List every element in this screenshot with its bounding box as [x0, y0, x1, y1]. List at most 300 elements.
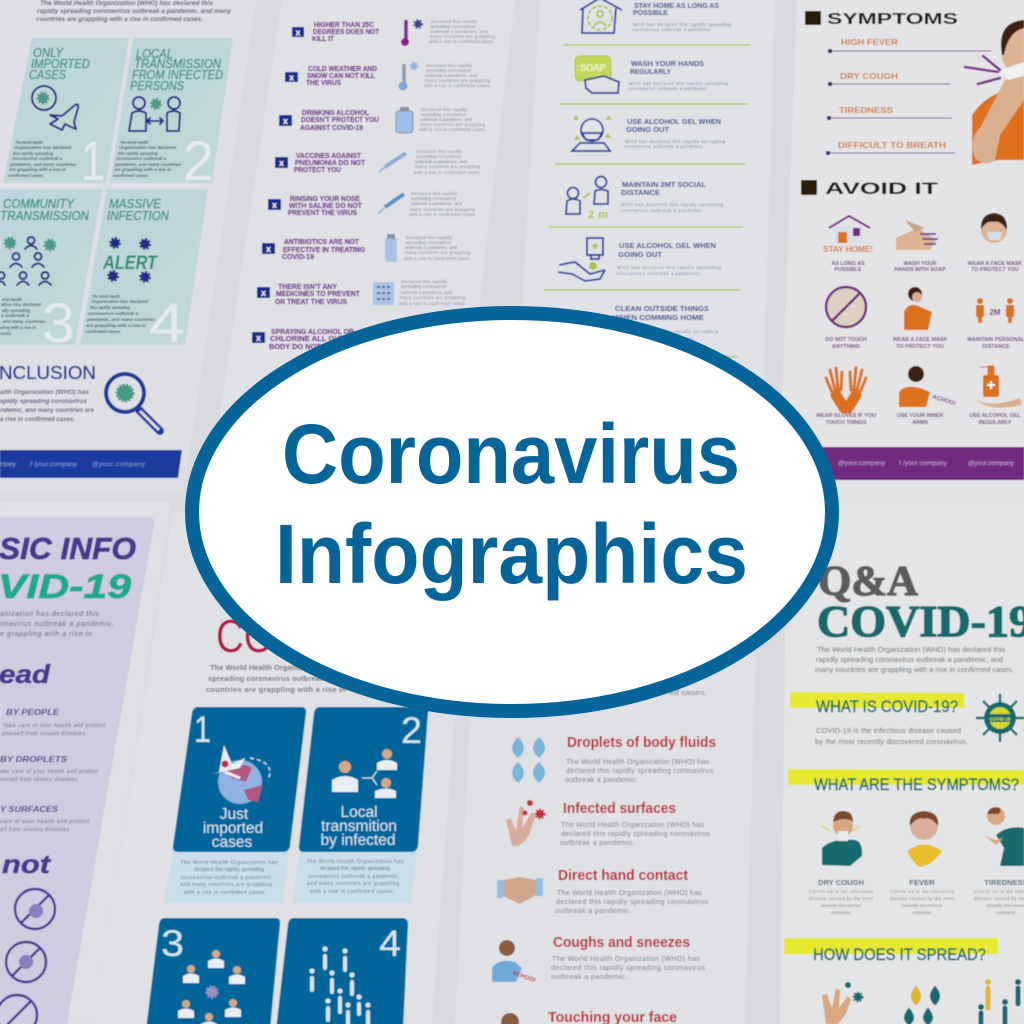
- title text: Coronavirus: [282, 407, 740, 501]
- myth descriptions: Declared this rapidly: [421, 107, 468, 112]
- card 4: 4: [379, 923, 401, 964]
- card 4: massive infection alert: 4: [149, 291, 185, 354]
- myth descriptions: Declared this rapidly: [411, 191, 458, 196]
- myth box marks: x: [256, 333, 261, 343]
- avoid it grid labels: USE YOUR INNER: [897, 413, 943, 419]
- spread section: yourself from viruses diseases.: [1, 731, 87, 737]
- card 4: massive infection alert: ALERT: [102, 253, 158, 274]
- row: coughs and sneezes: [492, 935, 705, 984]
- card 1: only imported cases: The World Health: [15, 140, 43, 145]
- icon: gloves: [826, 368, 866, 408]
- panel: myths list sheet: [205, 0, 515, 512]
- heading: Q&A: [818, 559, 919, 605]
- icon: hand with viruses: [822, 982, 862, 1024]
- prevention row text: GOING OUT: [618, 250, 662, 259]
- avoid it grid labels: AS LONG AS: [831, 261, 865, 267]
- intro text: e grappling with a rise in: [0, 631, 92, 638]
- footer bar: f /your.company: [899, 460, 948, 467]
- myth descriptions: spreading coronavirus: [421, 112, 467, 117]
- section: what is covid-19: by the most recently discovered coronavirus.: [815, 737, 968, 746]
- icon: masked person: [572, 117, 611, 151]
- intro text: [36, 0, 232, 23]
- card 4: massive infection alert: pandemic, and many countries: [86, 317, 155, 322]
- icon: fever person: [907, 811, 942, 867]
- symptom labels and captions: COVID-19 is the infectious: [809, 889, 874, 894]
- myth headings: PREVENT THE VIRUS: [288, 208, 357, 217]
- myth descriptions: Declared this rapidly: [401, 279, 448, 284]
- avoid it grid labels: DISTANCE: [982, 344, 1010, 350]
- card 2: local transmission: this rapidly spreading: [118, 151, 158, 156]
- icon: covid-19 virus badge: [976, 694, 1024, 742]
- symptom list: [826, 37, 991, 155]
- myth headings: AGAINST COVID-19: [300, 123, 363, 132]
- card 3: community transmission: [0, 189, 102, 354]
- myth headings: DRINKING ALCOHOL: [302, 108, 369, 117]
- card 1: and many countries are grappling: [180, 882, 272, 888]
- prevention row text: WHO has declared this rapidly spreading: [621, 202, 724, 207]
- card 4: massive infection alert: MASSIVE: [109, 196, 161, 211]
- symptom labels and captions: coronavirus.: [831, 910, 851, 915]
- card 4: massive infection alert: The World Health: [92, 294, 120, 299]
- card 1: 1: [194, 709, 211, 750]
- myth descriptions: spreading coronavirus: [411, 196, 457, 201]
- avoid it grid labels: POSSIBLE: [834, 267, 862, 273]
- myth descriptions: spreading coronavirus: [416, 154, 462, 159]
- spread section: BY DROPLETS: [0, 754, 67, 764]
- prevention row text: WHEN COMMING HOME: [613, 313, 704, 322]
- myth descriptions: many countries are grappling: [420, 122, 485, 127]
- footer bar: [0, 450, 182, 478]
- do not heading: not: [2, 849, 52, 879]
- card 2: local transmission: 2: [183, 129, 214, 192]
- avoid it grid labels: TO PROTECT YOU: [896, 344, 944, 350]
- symptom list: TIREDNESS: [839, 105, 893, 115]
- prevention row text: DISTANCE: [621, 188, 660, 197]
- avoid it grid labels: REGULARLY: [978, 420, 1012, 426]
- symptom list: DIFFICULT TO BREATH: [838, 140, 946, 150]
- panel: transmission stages sheet: [0, 0, 256, 490]
- myth descriptions: outbreak a pandemic, and: [420, 117, 472, 122]
- icon: social distance: [566, 176, 608, 221]
- intro text: countries are grappling with a rise in: [206, 685, 346, 694]
- avoid it grid labels: WEAR A FACE MASK: [968, 261, 1022, 267]
- card 1: only imported cases: coronavirus outbreak a: [12, 156, 62, 161]
- prevention row text: WHO has declared this rapidly spreading: [617, 265, 722, 270]
- title text: [275, 407, 748, 601]
- myth descriptions: many countries are grappling: [430, 34, 495, 39]
- myth headings: VACCINES AGAINST: [296, 151, 361, 160]
- title text: Infographics: [275, 507, 748, 601]
- myth descriptions: outbreak a pandemic, and: [430, 29, 488, 34]
- myth descriptions: outbreak a pandemic, and: [405, 245, 457, 250]
- avoid it heading: AVOID IT: [825, 180, 938, 198]
- card 4: [276, 918, 408, 1024]
- card 1: with a rise in confirmed cases.: [184, 890, 266, 896]
- card 1: only imported cases: this rapidly spreading: [13, 151, 53, 156]
- card 3: community transmission: pling with a rise in: [0, 325, 36, 330]
- heading: [0, 531, 136, 606]
- myth descriptions: many countries are grappling: [425, 78, 490, 83]
- avoid it grid labels: ANYTHING: [832, 344, 860, 350]
- card 2: and many countries are grappling: [307, 881, 399, 887]
- card 4: massive infection alert: confirmed cases.: [85, 329, 121, 334]
- intro text: [815, 645, 1014, 674]
- myth headings: EFFECTIVE IN TREATING: [283, 245, 365, 254]
- icon: 2m distance: [976, 298, 1014, 323]
- intro text: onavirus outbreak a pandemic,: [0, 621, 114, 628]
- card 1: only imported cases: are grappling with a rise in: [9, 167, 66, 172]
- myth descriptions: with a rise in confirmed cases.: [404, 256, 471, 261]
- prevention row text: coronavirus outbreak a pandemic.: [632, 27, 712, 32]
- row: droplets of body fluids: [514, 735, 716, 784]
- myth headings: SPRAYING ALCOHOL OR: [271, 327, 355, 336]
- myth descriptions: outbreak a pandemic, and: [410, 201, 462, 206]
- prevention row text: coronavirus outbreak a pandemic.: [624, 144, 704, 149]
- myth headings: COLD WEATHER AND: [308, 64, 377, 73]
- card 2: local transmission: are grappling with a rise in: [114, 167, 171, 172]
- symptom list: HIGH FEVER: [841, 37, 898, 47]
- card 3: community transmission: s outbreak a: [1, 313, 29, 318]
- symptom labels and captions: FEVER: [909, 878, 935, 887]
- card 2: with a rise in confirmed cases.: [310, 889, 394, 895]
- panel: basic info sheet: [0, 502, 172, 1024]
- avoid it grid labels: WEAR GLOVES IF YOU: [816, 413, 876, 419]
- avoid it grid labels: ARMS: [912, 420, 928, 426]
- symptoms heading: SYMPTOMS: [827, 11, 958, 28]
- icon: soap and hand: SOAP: [580, 63, 606, 74]
- footer bar: mpany: [0, 461, 17, 468]
- card 2: local transmission: coronavirus outbreak a: [116, 156, 166, 161]
- row: coughs and sneezes: declared this rapidly spreading coronavirus: [551, 963, 705, 972]
- card 2: local transmission: TRANSMISSION: [134, 56, 222, 71]
- myth descriptions: Declared this rapidly: [426, 63, 473, 68]
- footer bar: @your.company: [92, 461, 146, 468]
- card 1: declared this rapidly spreading: [194, 867, 264, 873]
- symptom labels and captions: coronavirus.: [996, 910, 1016, 915]
- row: droplets of body fluids: The World Health Organization (WHO) has: [566, 757, 709, 766]
- myth headings: RINSING YOUR NOSE: [290, 194, 360, 203]
- myth descriptions: many countries are grappling: [410, 207, 475, 212]
- row: droplets of body fluids: outbreak a pandemic.: [565, 775, 638, 784]
- row: infected surfaces: The World Health Organization (WHO) has: [561, 820, 704, 829]
- myth headings: BODY DO NOT KILL: [269, 342, 340, 351]
- row: infected surfaces: outbreak a pandemic.: [560, 838, 635, 847]
- prevention row text: [611, 1, 732, 341]
- row: direct hand contact: declared this rapidly spreading coronavirus: [556, 897, 708, 906]
- spread section: care of your health and protect: [0, 819, 90, 825]
- myth descriptions: spreading coronavirus: [430, 24, 476, 29]
- prevention row text: coronavirus outbreak a pandemic.: [611, 336, 696, 341]
- symptom list: DRY COUGH: [840, 71, 898, 81]
- card 2: local transmission: LOCAL: [136, 46, 173, 61]
- myth descriptions: spreading coronavirus: [401, 284, 447, 289]
- section: what is covid-19: WHAT IS COVID-19?: [816, 698, 958, 716]
- card 1: only imported cases: IMPORTED: [31, 56, 90, 71]
- heading: [817, 559, 1024, 646]
- avoid it grid labels: USE ALCOHOL GEL: [969, 413, 1021, 419]
- card 3: community transmission: idly spreading: [2, 308, 30, 313]
- myth descriptions: with a rise in confirmed cases.: [424, 83, 491, 88]
- myth headings: DEGREES DOES NOT: [313, 27, 379, 36]
- row: coughs and sneezes: The World Health Organization (WHO) has: [552, 954, 700, 963]
- row: infected surfaces: [506, 800, 710, 847]
- row: direct hand contact: Direct hand contact: [558, 868, 688, 884]
- symptom labels and captions: [809, 878, 1024, 915]
- card 2: transmition: [321, 818, 397, 835]
- card 2: [293, 707, 428, 903]
- card 2: local transmission: [110, 38, 233, 192]
- icon: sneezing child: [899, 366, 956, 407]
- icon: tired person: [985, 807, 1024, 866]
- myth box marks: x: [283, 116, 288, 126]
- prevention row text: USE ALCOHOL GEL WHEN: [627, 117, 721, 126]
- card 4: massive infection alert: [80, 189, 208, 354]
- card 2: 2: [401, 710, 422, 751]
- heading: VID-19: [0, 568, 131, 606]
- conclusion heading and text: apidly spreading coronavirus: [0, 398, 87, 405]
- row: droplets of body fluids: declared this rapidly spreading coronavirus: [566, 766, 713, 775]
- icon: soap and hand: [575, 56, 619, 93]
- intro text: spreading coronavirus outbreak: [208, 674, 325, 683]
- myth headings: HIGHER THAN 25C: [314, 20, 375, 29]
- prevention row text: coronavirus outbreak a pandemic.: [628, 86, 708, 91]
- card 1: Just: [220, 806, 249, 823]
- prevention row text: WHO has declared this rapidly spreading: [625, 139, 726, 144]
- card 2: local transmission: Organization has declared: [119, 145, 176, 150]
- avoid it heading: [801, 180, 938, 198]
- icon: covid-19 virus badge: COVID-19: [990, 716, 1011, 722]
- section: how does it spread: HOW DOES IT SPREAD?: [813, 946, 986, 964]
- myth descriptions: with a rise in confirmed cases.: [409, 212, 476, 217]
- icons: prohibited actions: [0, 889, 55, 1024]
- myth headings: DOESN'T PROTECT YOU: [301, 115, 379, 124]
- card 3: 3: [161, 923, 184, 964]
- card 2: local transmission: confirmed cases.: [113, 173, 149, 178]
- row: infected surfaces: Infected surfaces: [563, 801, 676, 817]
- prevention row text: coronavirus outbreak a pandemic.: [620, 208, 703, 213]
- conclusion heading and text: NCLUSION: [0, 362, 96, 383]
- symptom labels and captions: recently discovered: [821, 903, 862, 908]
- spread section: ourself from viruses diseases.: [0, 777, 79, 783]
- card 3: community transmission: , and many countries: [0, 319, 45, 324]
- prevention row text: CLEAN OUTSIDE THINGS: [615, 304, 709, 313]
- myth descriptions: Declared this rapidly: [406, 235, 453, 240]
- prevention row text: POSSIBLE: [633, 8, 668, 17]
- card 4: massive infection alert: Organization has declared: [91, 299, 148, 304]
- card 4: massive infection alert: this rapidly spreading: [90, 305, 130, 310]
- myth headings: WITH SALINE DO NOT: [289, 201, 362, 210]
- myth box marks: x: [289, 72, 294, 82]
- prevention row text: GOING OUT: [626, 125, 669, 134]
- avoid it grid labels: TO PROTECT YOU: [971, 267, 1019, 273]
- row: coughs and sneezes: ACHOO!: [511, 970, 536, 984]
- row: infected surfaces: declared this rapidly spreading coronavirus: [561, 829, 710, 838]
- section: what is covid-19: COVID-19 is the infectious disease caused: [816, 726, 961, 735]
- icon: dry cough person: [822, 811, 862, 866]
- icon: social distance: 2m: [588, 209, 608, 221]
- intro text: many countries are grappling with a rise in confirmed cases.: [815, 665, 1014, 674]
- prevention row text: USE ALCOHOL GEL WHEN: [619, 241, 716, 250]
- prevention row text: STAY HOME AS LONG AS: [634, 1, 719, 10]
- myth box marks: x: [261, 288, 266, 298]
- conclusion heading and text: [0, 362, 96, 423]
- myth headings: COVID-19: [282, 252, 314, 261]
- myth descriptions: many countries are grappling: [400, 295, 465, 300]
- myth descriptions: outbreak a pandemic, and: [400, 290, 452, 295]
- spread section: ake care of your health and protect: [0, 769, 99, 775]
- title ellipse badge: [192, 313, 832, 711]
- avoid it grid labels: [816, 261, 1024, 426]
- intro text: anization has declared this: [0, 611, 100, 618]
- footer bar: @your.company: [968, 460, 1015, 467]
- card 3: community transmission: ation has declared: [1, 302, 41, 307]
- icon: stay home: STAY HOME!: [823, 244, 873, 254]
- card 2: local transmission: FROM INFECTED: [132, 67, 223, 82]
- intro text: [206, 663, 346, 694]
- card 1: only imported cases: CASES: [29, 67, 66, 82]
- myth descriptions: with a rise in confirmed cases.: [429, 39, 495, 44]
- spread section: ead: [0, 659, 51, 689]
- row: direct hand contact: [497, 868, 708, 915]
- card 3: community transmission: COMMUNITY: [3, 196, 75, 211]
- cut-off intro text: ed cases.: [669, 688, 707, 697]
- panel: stages in blue cards sheet: [95, 512, 470, 1024]
- myth headings: THE VIRUS: [306, 78, 341, 87]
- card 2: Local: [340, 804, 378, 821]
- myth descriptions: outbreak a pandemic, and: [425, 73, 477, 78]
- icon: wash hands: [896, 220, 938, 250]
- myth headings: [269, 20, 379, 351]
- prevention row text: WHO has declared this rapidly spreading: [633, 22, 732, 27]
- avoid it grid labels: HANDS WITH SOAP: [894, 267, 946, 273]
- card 2: coronavirus outbreak a pandemic,: [308, 874, 400, 880]
- card 1: [164, 707, 306, 903]
- myth box marks: x: [272, 200, 277, 210]
- intro text: [0, 611, 114, 638]
- icon: alcohol gel bottle: [976, 366, 1022, 408]
- conclusion heading and text: ndemic, and many countries are: [0, 407, 94, 414]
- row: direct hand contact: outbreak a pandemic.: [555, 906, 631, 915]
- icon: 2m distance: 2M: [989, 308, 1001, 317]
- intro text: countries are grappling with a rise in confirmed cases.: [36, 16, 203, 23]
- myth headings: OR TREAT THE VIRUS: [275, 297, 347, 306]
- spread section: Take care of your health and protect: [3, 723, 106, 729]
- myth boxes: [252, 27, 304, 343]
- card 2: The World Health Organization has: [306, 859, 404, 865]
- myth descriptions: with a rise in confirmed cases.: [414, 170, 481, 175]
- avoid it grid labels: MAINTAIN PERSONAL: [967, 337, 1024, 343]
- symptoms heading: [805, 11, 958, 28]
- panel: Q and A sheet: [780, 500, 1024, 1024]
- prevention row text: WHO has declared this rapidly spreading: [629, 81, 729, 86]
- card 3: community transmission: TRANSMISSION: [0, 208, 90, 223]
- prevention row text: MAINTAIN 2MT SOCIAL: [622, 180, 706, 189]
- icon: gel dispenser and hand: [558, 238, 605, 281]
- intro text: The World Health Organization: [210, 663, 320, 672]
- icon: stay home: [580, 0, 622, 33]
- symptom labels and captions: disease caused by the most: [890, 896, 955, 901]
- symptom labels and captions: disease caused by the most: [809, 896, 874, 901]
- prevention row text: coronavirus outbreak a pandemic.: [616, 271, 701, 276]
- card 1: The World Health Organization has: [180, 860, 278, 866]
- row: coughs and sneezes: outbreak a pandemic.: [551, 972, 627, 981]
- card 2: declared this rapidly spreading: [320, 866, 390, 872]
- section: how does it spread: [784, 938, 998, 964]
- icon: people: [978, 979, 1021, 1024]
- card 1: coronavirus outbreak a pandemic,: [181, 875, 273, 881]
- card 4: massive infection alert: coronavirus outbreak a: [88, 311, 138, 316]
- card 2: local transmission: pandemic, and many countries: [114, 162, 181, 167]
- myth box marks: [256, 28, 301, 343]
- avoid it grid labels: WEAR A FACE MASK: [893, 337, 947, 343]
- myth headings: CHLORINE ALL OVER: [270, 334, 351, 343]
- myth headings: MEDICINES TO PREVENT: [276, 289, 360, 298]
- myth descriptions: with a rise in confirmed cases.: [399, 301, 466, 306]
- conclusion heading and text: alth Organization (WHO) has: [0, 389, 89, 396]
- myth headings: PROTECT YOU: [294, 165, 341, 174]
- icon: stay home: [823, 216, 873, 254]
- red heading fragment: CO: [216, 610, 274, 662]
- myth headings: SNOW CAN NOT KILL: [307, 71, 375, 80]
- myth headings: KILL IT: [312, 34, 334, 43]
- heading: COVID-19: [817, 597, 1024, 646]
- icon: magnifier with virus: [106, 374, 160, 431]
- card 2: local transmission: PERSONS: [130, 78, 184, 93]
- card 1: only imported cases: pandemic, and many countries: [9, 162, 76, 167]
- prevention row text: WASH YOUR HANDS: [631, 59, 704, 68]
- card 1: only imported cases: Organization has declared: [14, 145, 71, 150]
- myth box marks: x: [295, 28, 301, 38]
- myth descriptions: Declared this rapidly: [416, 149, 463, 154]
- row: coughs and sneezes: Coughs and sneezes: [553, 935, 690, 951]
- row: direct hand contact: The World Health Organization (WHO) has: [557, 888, 702, 897]
- heading: SIC INFO: [0, 531, 136, 566]
- card 1: only imported cases: [3, 38, 129, 192]
- card 3: community transmission: 3: [42, 291, 75, 354]
- spread section: [0, 659, 106, 833]
- section: what is covid-19: [790, 692, 968, 746]
- myth headings: THERE ISN'T ANY: [278, 282, 337, 291]
- separator lines: [538, 45, 750, 357]
- panel: symptoms and avoid-it sheet: [778, 0, 1024, 512]
- myth box marks: x: [266, 244, 271, 254]
- card 1: only imported cases: 1: [81, 129, 105, 192]
- card 4: massive infection alert: INFECTION: [107, 208, 170, 223]
- card 2: local transmission: The World Health: [120, 140, 148, 145]
- symptom labels and captions: recently discovered: [902, 903, 943, 908]
- icon: do not touch: [826, 287, 866, 327]
- row: droplets of body fluids: Droplets of body fluids: [567, 735, 716, 751]
- myth descriptions: spreading coronavirus: [426, 68, 472, 73]
- intro text: rapidly spreading coronavirus outbreak a pandemic, and: [816, 655, 1003, 664]
- footer bar: [815, 447, 1024, 480]
- card 3: community transmission: cases.: [0, 331, 12, 336]
- myth descriptions: outbreak a pandemic, and: [415, 159, 467, 164]
- icon: droplets: [905, 987, 939, 1024]
- card 3: community transmission: orld Health: [2, 297, 22, 302]
- avoid it grid labels: DO NOT TOUCH: [825, 337, 867, 343]
- symptom labels and captions: COVID-19 is the infectious: [890, 889, 955, 894]
- avoid it grid labels: WASH YOUR: [903, 261, 937, 267]
- card 1: cases: [212, 834, 252, 851]
- spread section: BY PEOPLE: [6, 707, 59, 717]
- myth box marks: x: [279, 158, 284, 168]
- myth descriptions: many countries are grappling: [415, 164, 480, 169]
- avoid it grid labels: TOUCH THINGS: [826, 420, 867, 426]
- myth descriptions: spreading coronavirus: [406, 240, 452, 245]
- prevention row text: REGULARLY: [630, 67, 671, 76]
- symptom labels and captions: DRY COUGH: [818, 878, 864, 887]
